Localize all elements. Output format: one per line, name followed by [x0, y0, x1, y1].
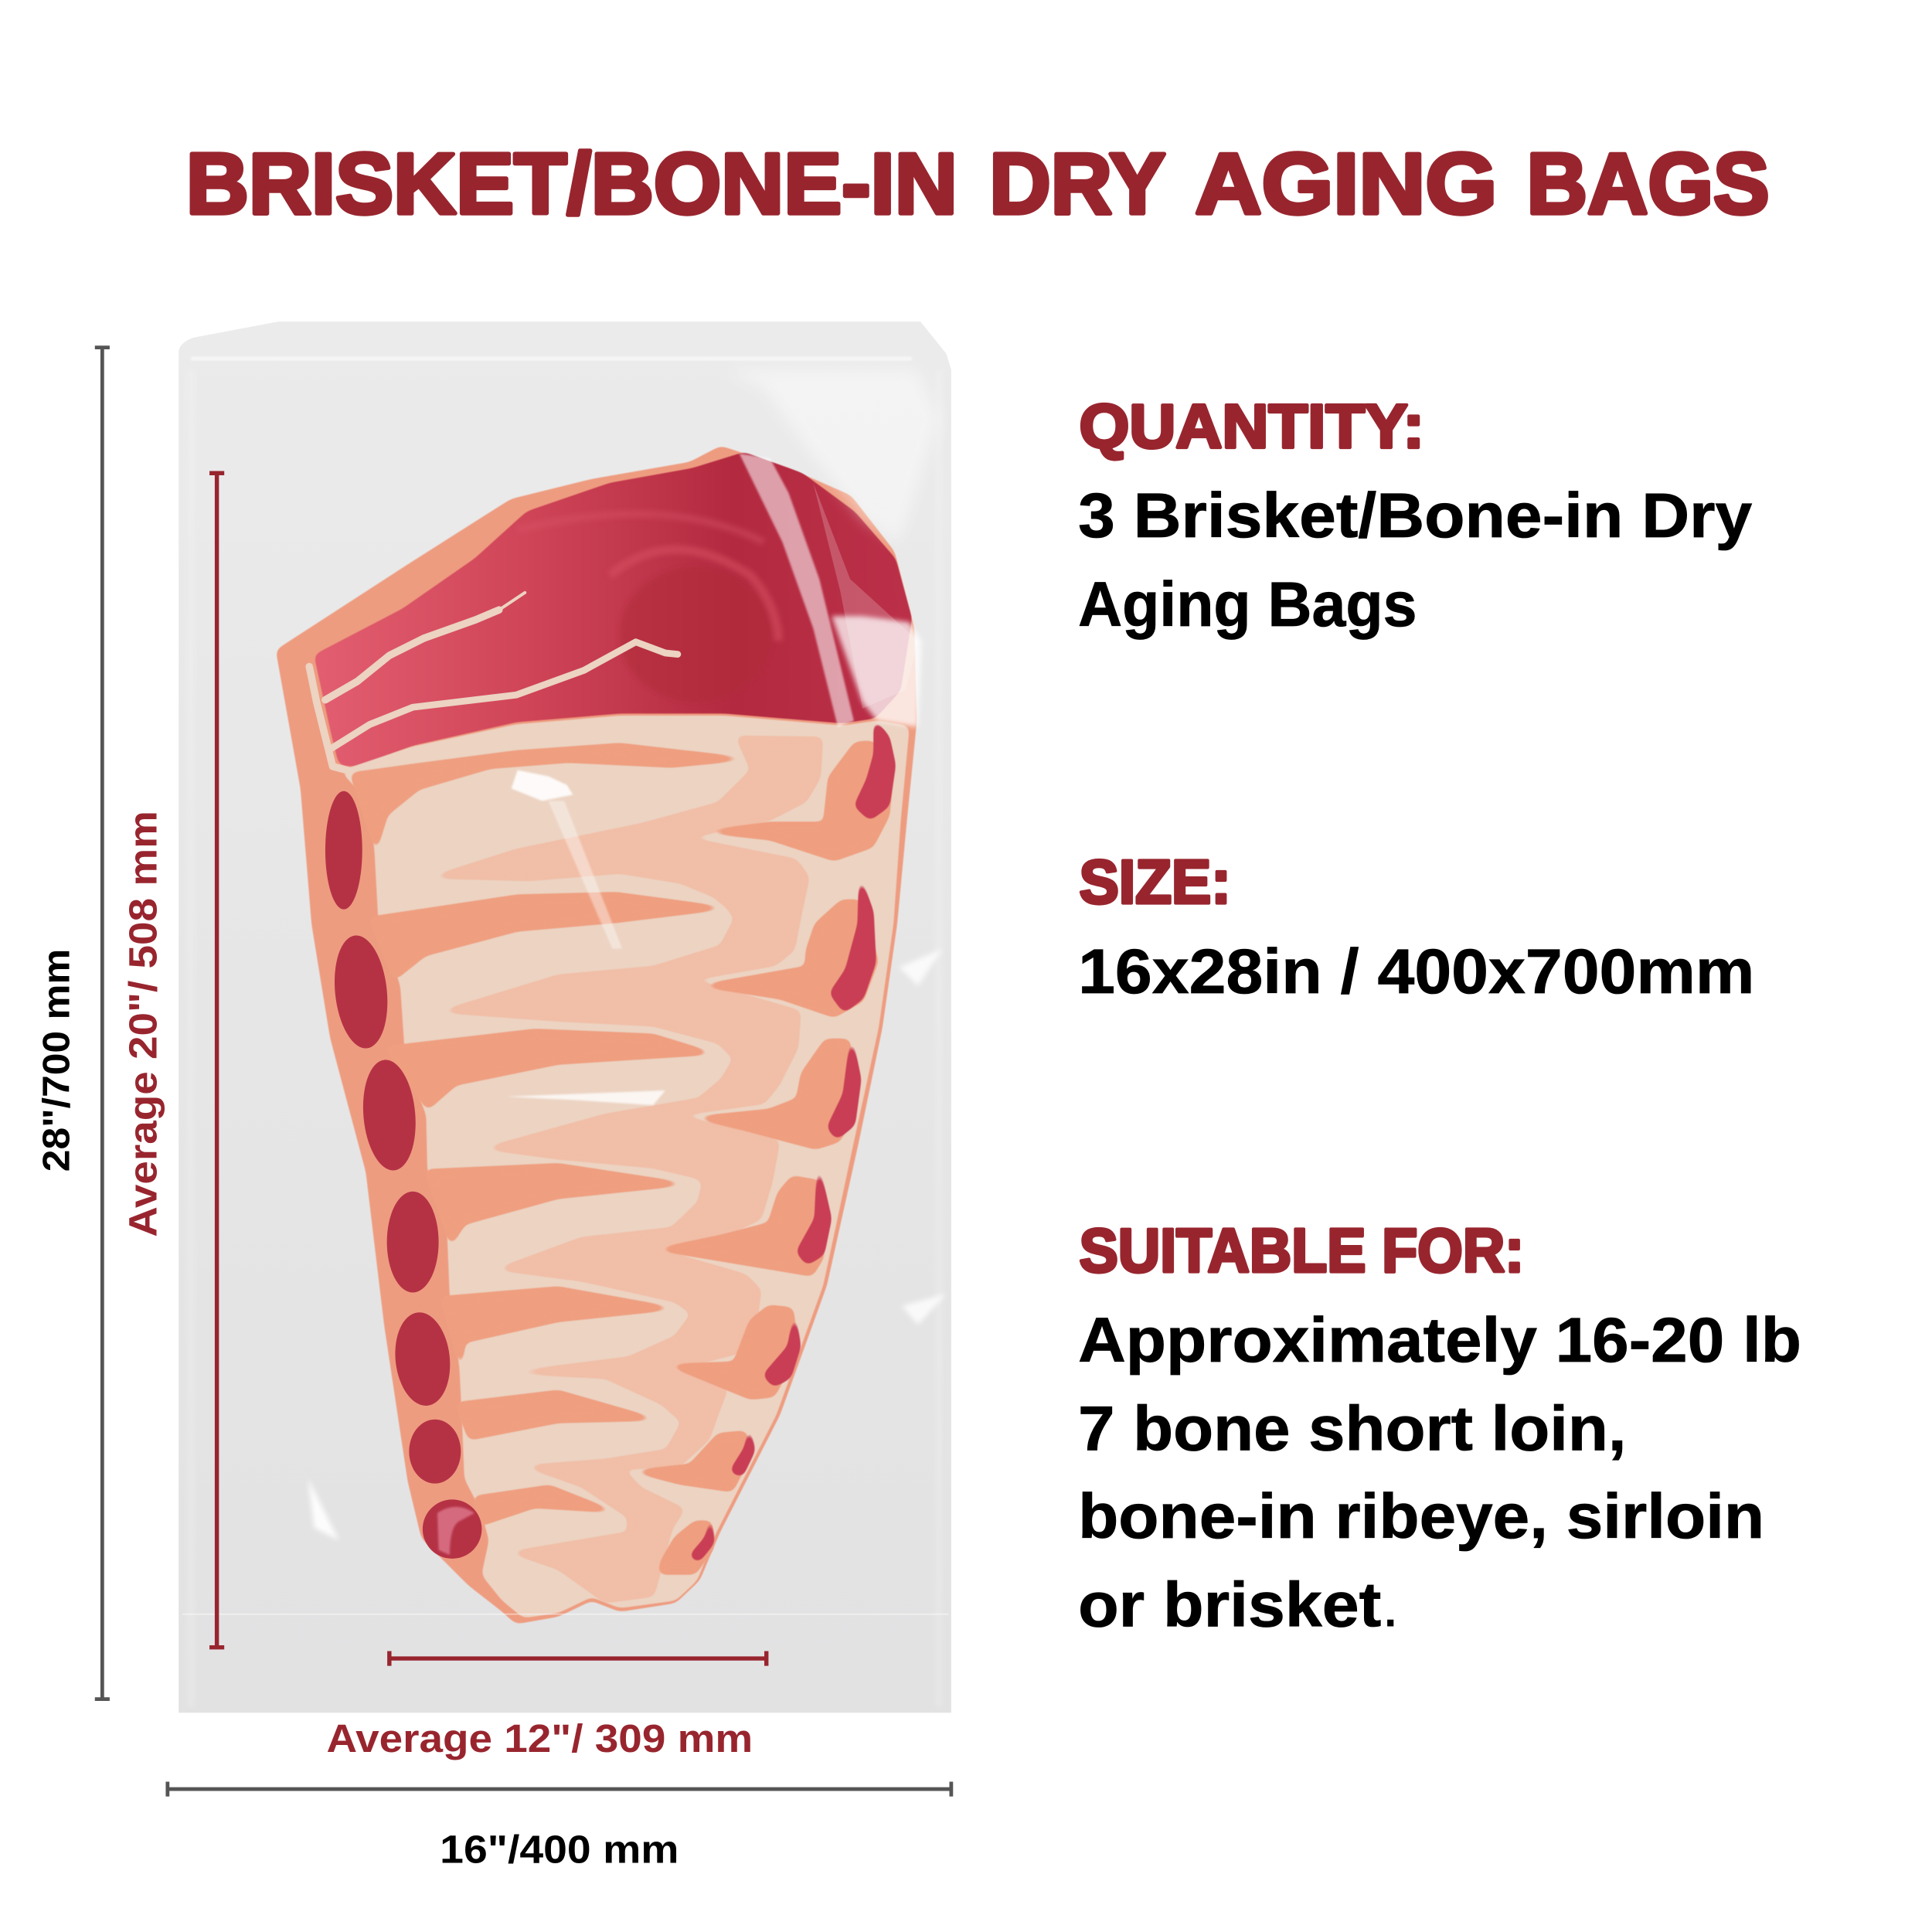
- meat cut: [277, 447, 916, 1623]
- title: DRY: [989, 135, 1165, 232]
- fat outline: [277, 447, 916, 1623]
- dimension label: meat width: Average 12"/ 309 mm: [327, 1716, 753, 1760]
- title: BRISKET/BONE-IN: [186, 135, 957, 232]
- text: quantity: Aging Bags: [1078, 570, 1417, 640]
- bones, left: [325, 791, 481, 1559]
- dimension label: bag height: 28"/700 mm: [35, 949, 77, 1172]
- dimension: meat height: [209, 473, 224, 1648]
- heading: size: SIZE:: [1080, 848, 1231, 917]
- title: BAGS: [1526, 135, 1770, 232]
- dimension: bag width: [168, 1781, 951, 1797]
- heading: quantity: QUANTITY:: [1080, 392, 1424, 461]
- dimension label: bag width: 16"/400 mm: [440, 1828, 679, 1872]
- text: size: 16x28in / 400x700mm: [1078, 937, 1754, 1007]
- lean marbling: [518, 514, 779, 702]
- bag: [179, 321, 951, 1713]
- lean meat: [315, 454, 910, 765]
- fat seams: [309, 593, 678, 771]
- heading: suitable for: SUITABLE FOR:: [1080, 1216, 1524, 1284]
- cream rib area: [342, 717, 908, 1617]
- rib stripes: [351, 744, 749, 1526]
- text: quantity: [1078, 481, 1752, 640]
- bone swirl: [437, 1507, 474, 1555]
- text: quantity: 3 Brisket/Bone-in Dry: [1078, 481, 1752, 551]
- dimension: bag height: [95, 348, 110, 1699]
- rib tips, red: [690, 721, 895, 1561]
- bag sheen highlights: [182, 359, 949, 1706]
- text: suitable for: 7 bone short loin,: [1078, 1394, 1627, 1464]
- rib ends, right: [634, 742, 893, 1573]
- text: suitable for: bone-in ribeye, sirloin: [1078, 1481, 1764, 1552]
- product illustration: vacuum bag with meat: [179, 321, 951, 1713]
- block: size: [1078, 848, 1754, 1007]
- text: suitable for: [1078, 1305, 1801, 1641]
- dimension: meat width: [389, 1651, 767, 1666]
- title: [186, 135, 1770, 232]
- block: quantity: [1078, 392, 1752, 640]
- text: suitable for: or brisket .: [1078, 1570, 1400, 1641]
- text: suitable for: Approximately 16-20 lb: [1078, 1305, 1801, 1376]
- block: suitable for: [1078, 1216, 1801, 1641]
- dimension label: meat height: Average 20"/ 508 mm: [121, 811, 165, 1237]
- title: AGING: [1196, 135, 1497, 232]
- peach muscle column: [431, 736, 821, 1602]
